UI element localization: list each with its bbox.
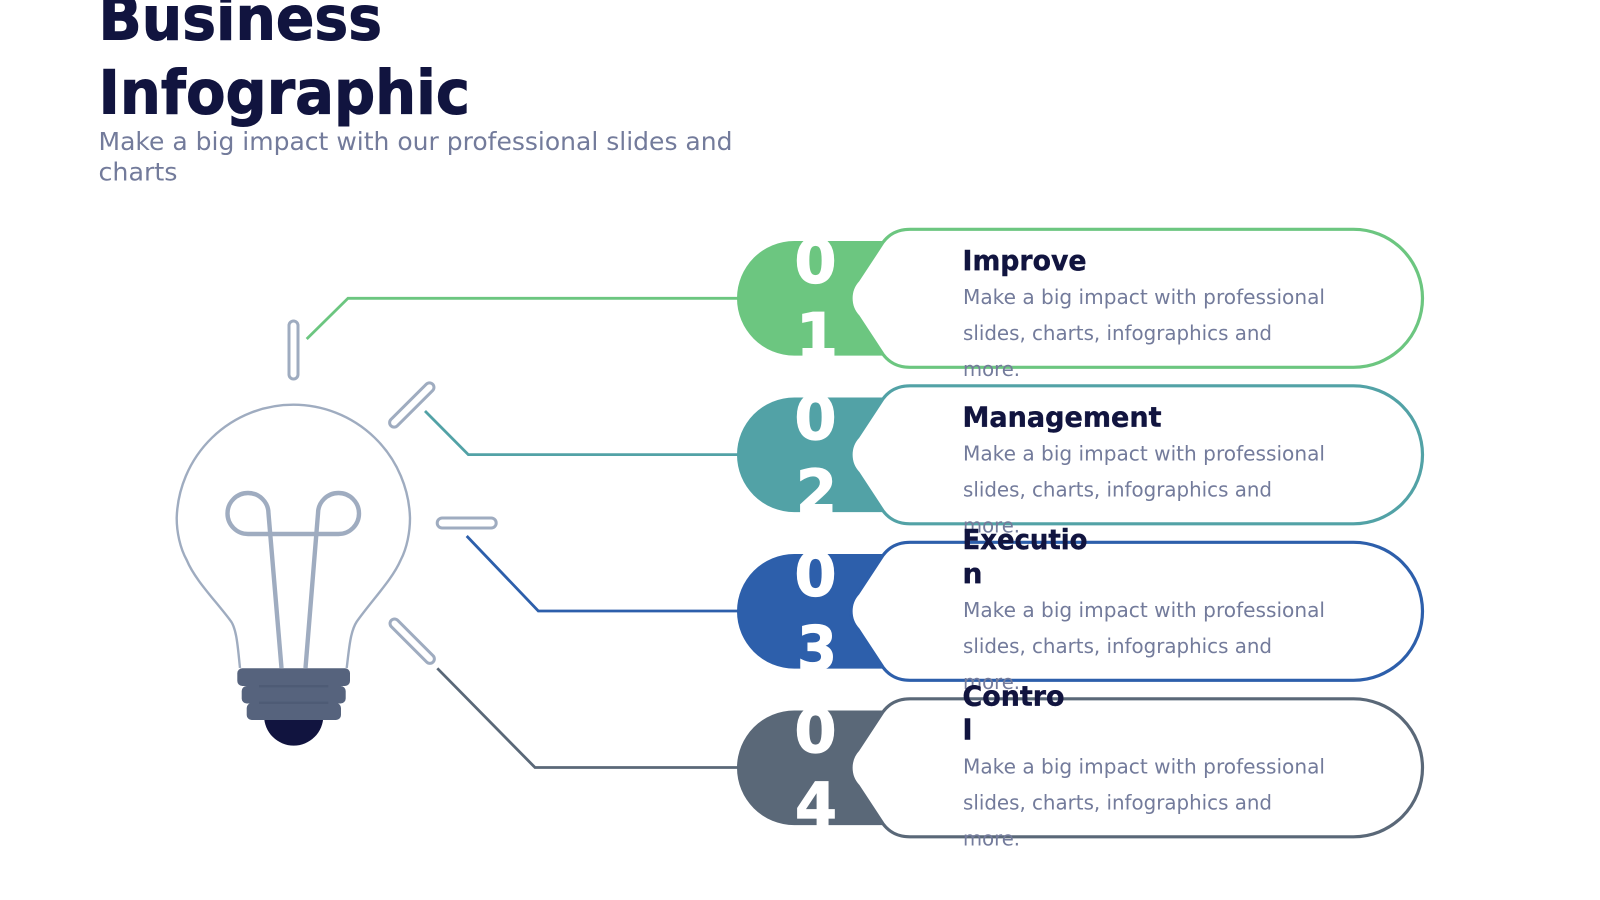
number 02: 2 xyxy=(796,457,837,528)
bulb filament xyxy=(228,493,359,668)
heading: l xyxy=(962,714,972,746)
description: slides, charts, infographics and xyxy=(963,634,1272,658)
connector: teal xyxy=(425,411,740,455)
description: more. xyxy=(963,513,1020,537)
description: slides, charts, infographics and xyxy=(963,790,1272,814)
number 01: 1 xyxy=(796,301,838,372)
description xyxy=(963,598,1325,694)
heading: Contro xyxy=(962,680,1064,712)
number 04: 4 xyxy=(795,770,837,841)
panel: step 04 Control xyxy=(737,680,1422,850)
pill outline xyxy=(851,386,1422,524)
title: Infographic xyxy=(98,58,470,128)
pill outline xyxy=(851,542,1422,680)
panel: step 01 Improve xyxy=(737,226,1422,381)
title xyxy=(98,0,470,128)
icon: ray lower right xyxy=(388,617,436,665)
icon: light bulb xyxy=(177,405,410,746)
number 01 xyxy=(794,226,838,372)
description xyxy=(963,754,1325,850)
bulb screw base xyxy=(237,668,350,720)
icon: ray top xyxy=(289,321,298,379)
description: more. xyxy=(963,826,1020,850)
number 01: 0 xyxy=(794,226,836,297)
pill outline xyxy=(851,699,1422,837)
number tab 02 xyxy=(737,398,900,512)
description xyxy=(963,285,1325,381)
number 03: 0 xyxy=(794,539,836,610)
subtitle: charts xyxy=(98,157,178,186)
heading: n xyxy=(962,558,982,590)
panel: step 03 Execution xyxy=(737,524,1422,694)
number tab 04 xyxy=(737,710,900,825)
number 02: 0 xyxy=(794,383,836,454)
number 04 xyxy=(794,696,837,841)
subtitle xyxy=(98,127,732,186)
bulb glass outline xyxy=(177,405,410,668)
heading: Executio xyxy=(962,524,1088,556)
panel: step 02 Management xyxy=(737,383,1422,538)
description: Make a big impact with professional xyxy=(963,441,1325,465)
number 04: 0 xyxy=(794,696,836,767)
number 03 xyxy=(794,539,837,685)
heading: Improve xyxy=(962,245,1086,277)
heading xyxy=(962,680,1064,746)
number 03: 3 xyxy=(797,614,837,685)
connector: blue xyxy=(467,536,740,611)
connector: green xyxy=(307,298,740,339)
number tab 01 xyxy=(737,241,900,356)
description: more. xyxy=(963,357,1020,381)
subtitle: Make a big impact with our professional slides and xyxy=(98,127,732,156)
connector: slate xyxy=(437,668,740,768)
description: Make a big impact with professional xyxy=(963,754,1325,778)
description: Make a big impact with professional xyxy=(963,285,1325,309)
description: more. xyxy=(963,670,1020,694)
description: Make a big impact with professional xyxy=(963,598,1325,622)
description: slides, charts, infographics and xyxy=(963,321,1272,345)
bulb tip xyxy=(264,686,323,746)
icon: ray upper right xyxy=(388,381,436,429)
number 02 xyxy=(794,383,837,528)
icon: ray right xyxy=(437,518,496,528)
heading xyxy=(962,524,1088,590)
pill outline xyxy=(851,229,1422,367)
number tab 03 xyxy=(737,554,900,669)
description: slides, charts, infographics and xyxy=(963,477,1272,501)
heading: Management xyxy=(962,401,1162,433)
description xyxy=(963,442,1325,538)
